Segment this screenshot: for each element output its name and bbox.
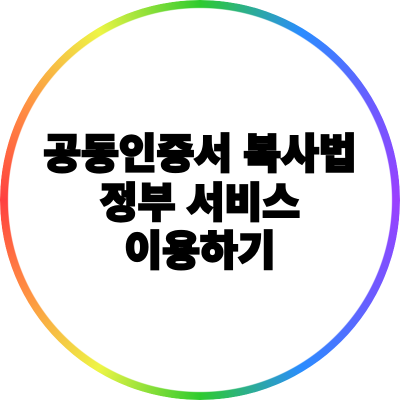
title xyxy=(43,131,357,274)
title: 공동인증서 복사법 xyxy=(43,131,357,177)
title: 이용하기 xyxy=(125,228,275,274)
title: 정부 서비스 xyxy=(100,180,300,226)
